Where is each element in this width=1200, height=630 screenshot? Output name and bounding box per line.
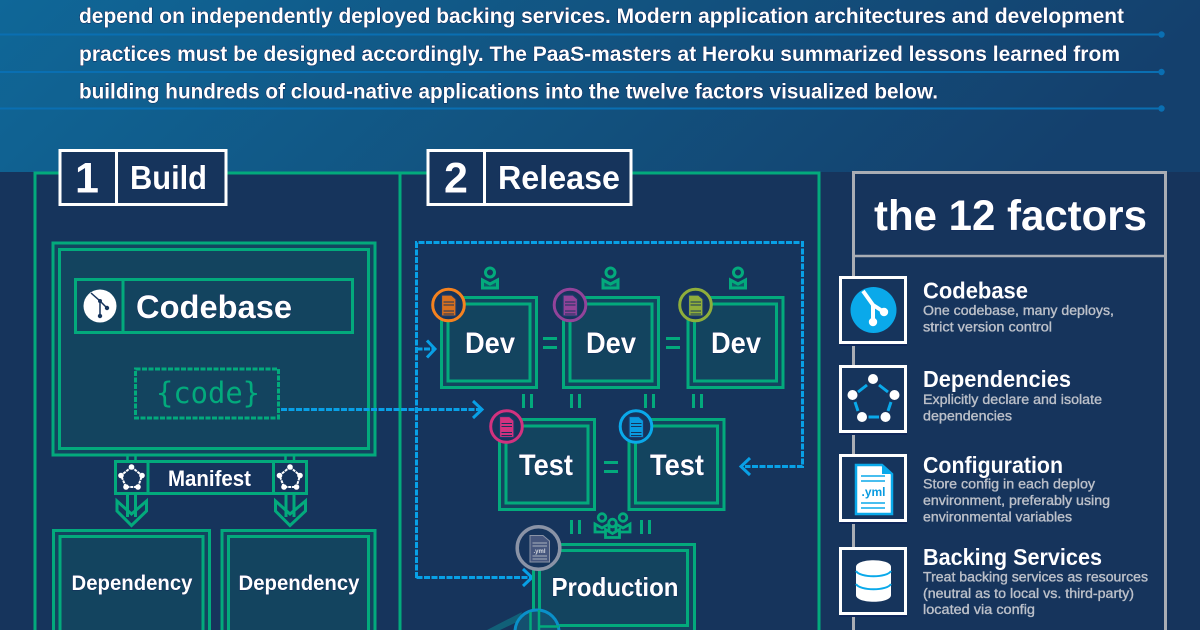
panel heading: the 12 factors bbox=[874, 192, 1147, 240]
panel: the 12 factors bbox=[840, 172, 1166, 630]
box: dev 3: Dev bbox=[711, 327, 761, 360]
config badge: grey bbox=[517, 527, 560, 569]
factor: codebase: One codebase, many deploys, bbox=[923, 303, 1114, 318]
icon: developer 2 bbox=[603, 268, 618, 288]
badge: 1 Build bbox=[60, 150, 226, 205]
icon: pentagon network bbox=[848, 374, 900, 422]
intro text: practices must be designed accordingly. The PaaS-masters at Heroku summarized lessons learned from bbox=[79, 42, 1120, 66]
icon: cropped process circle bbox=[487, 610, 559, 630]
box: dependency right bbox=[222, 530, 375, 630]
factor: backing services: Backing Services bbox=[923, 544, 1102, 570]
box: dev 2 bbox=[564, 298, 658, 388]
code snippet box bbox=[136, 369, 278, 418]
badge: 1 Build: 1 bbox=[75, 154, 99, 202]
factor: dependencies: Explicitly declare and isolate bbox=[923, 392, 1102, 407]
config badge: orange bbox=[433, 289, 464, 321]
factor: configuration: Store config in each deploy bbox=[923, 476, 1095, 492]
box: dependency left: Dependency bbox=[72, 572, 193, 595]
factor: codebase: Codebase bbox=[923, 278, 1028, 304]
arrow: release config loop bbox=[416, 242, 802, 586]
factor: codebase bbox=[840, 278, 1114, 346]
icon: yml file: .yml bbox=[861, 485, 886, 499]
box: test 2 bbox=[629, 420, 724, 510]
badge: 2 Release: Release bbox=[498, 159, 620, 196]
box: production bbox=[534, 544, 694, 630]
box: dev 1: Dev bbox=[465, 327, 515, 360]
box: production: Production bbox=[552, 572, 678, 602]
box: dependency right: Dependency bbox=[238, 572, 360, 595]
config badge: pink bbox=[491, 411, 522, 442]
icon: left pentagon bbox=[118, 464, 145, 490]
manifest connector: Manifest bbox=[168, 466, 252, 491]
factor: backing services bbox=[840, 544, 1148, 617]
badge: 2 Release: 2 bbox=[444, 154, 468, 202]
factor: configuration: environmental variables bbox=[923, 510, 1072, 524]
factor: backing services: (neutral as to local vs. third-party) bbox=[923, 586, 1134, 601]
intro text: building hundreds of cloud-native applications into the twelve factors visualized below. bbox=[79, 80, 938, 104]
factor: dependencies: dependencies bbox=[923, 408, 1012, 424]
icon: user group bbox=[595, 514, 630, 538]
icon: developer 3 bbox=[730, 268, 746, 288]
factor: codebase: strict version control bbox=[923, 320, 1052, 334]
code snippet box: {code} bbox=[156, 376, 260, 410]
box: test 1 bbox=[500, 420, 594, 510]
intro text bbox=[79, 4, 1124, 104]
badge: 1 Build: Build bbox=[130, 159, 207, 196]
panel: codebase bbox=[53, 243, 375, 455]
factor: backing services: Treat backing services as resources bbox=[923, 570, 1148, 584]
icon: developer 1 bbox=[482, 268, 498, 288]
box: dependency left bbox=[54, 530, 210, 630]
codebase title bar bbox=[76, 279, 352, 333]
icon: branch bbox=[850, 287, 896, 333]
icon: yml file bbox=[856, 465, 892, 514]
box: test 1: Test bbox=[519, 449, 573, 482]
codebase title bar: Codebase bbox=[136, 289, 292, 325]
factor: configuration: Configuration bbox=[923, 452, 1063, 478]
factor: configuration bbox=[840, 452, 1110, 524]
box: dev 2: Dev bbox=[586, 327, 636, 360]
header band bbox=[0, 0, 1200, 172]
intro text: depend on independently deployed backing services. Modern application architectures and development bbox=[79, 4, 1124, 28]
manifest connector bbox=[116, 455, 306, 494]
panel: build and release frame bbox=[35, 173, 819, 630]
badge: 2 Release bbox=[428, 150, 631, 205]
config badge: purple bbox=[554, 289, 586, 321]
icon: right pentagon bbox=[277, 464, 303, 490]
arrow: manifest to left dependency bbox=[117, 494, 146, 526]
arrow: code to test bbox=[281, 401, 482, 418]
equals and parallel signs bbox=[522, 337, 703, 534]
box: dev 1 bbox=[442, 298, 536, 388]
config badge: grey: .yml bbox=[533, 549, 546, 555]
factor: configuration: environment, preferably using bbox=[923, 493, 1110, 508]
factor: dependencies: Dependencies bbox=[923, 366, 1071, 392]
box: test 2: Test bbox=[650, 449, 704, 482]
box: dev 3 bbox=[688, 298, 783, 388]
config badge: blue bbox=[620, 411, 652, 442]
config badge: green bbox=[680, 289, 711, 321]
icon: database bbox=[856, 560, 891, 602]
arrow: manifest to right dependency bbox=[276, 494, 306, 526]
factor: dependencies bbox=[840, 366, 1102, 435]
factor: backing services: located via config bbox=[923, 602, 1035, 617]
